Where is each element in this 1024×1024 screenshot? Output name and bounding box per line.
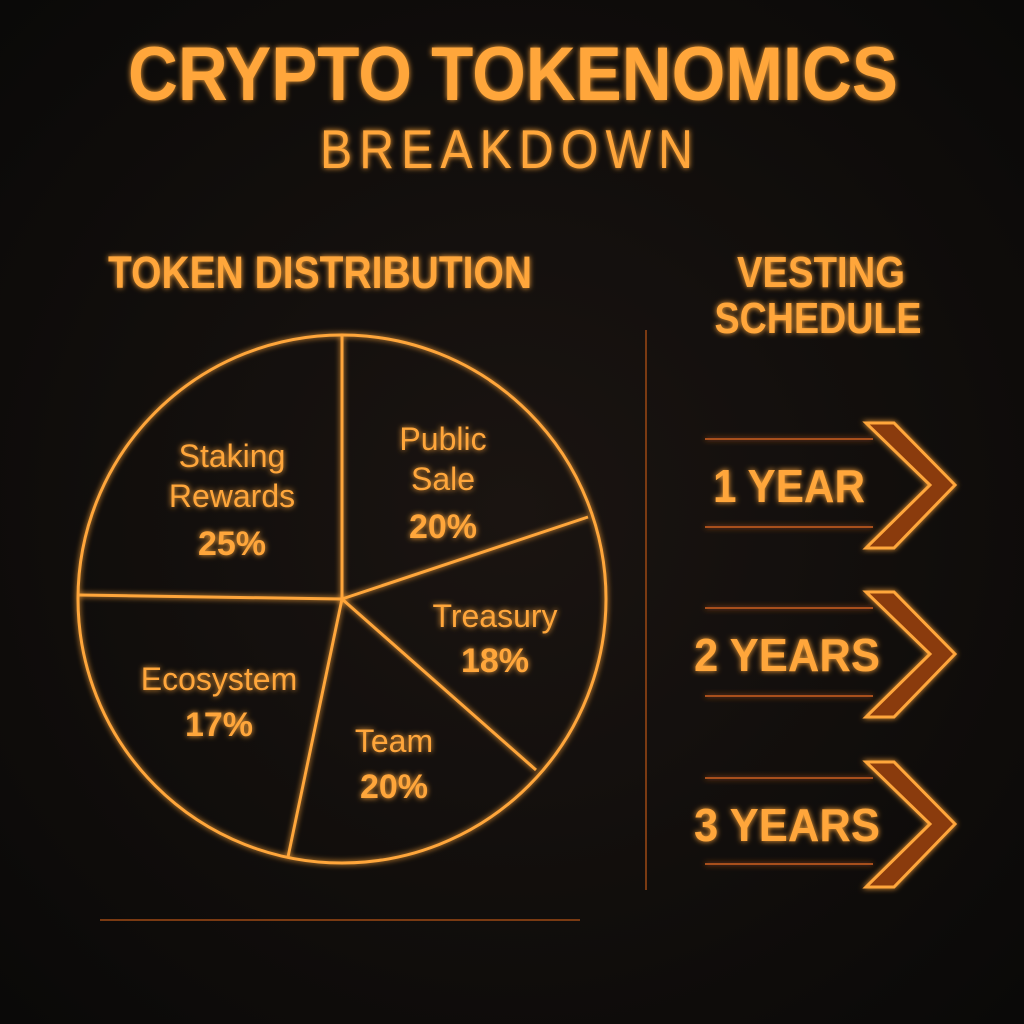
- vesting: 3 years: [694, 762, 955, 887]
- pie labels: 20%: [360, 768, 428, 806]
- pie labels: 17%: [185, 706, 253, 744]
- heading: vesting schedule: [714, 248, 922, 343]
- vesting: 1 year: [705, 423, 955, 548]
- pie labels: Ecosystem: [141, 661, 297, 697]
- pie labels: 25%: [198, 525, 266, 563]
- title: [128, 32, 898, 180]
- pie labels: Team: [355, 723, 433, 759]
- pie labels: Public: [399, 421, 487, 457]
- heading: token distribution: TOKEN DISTRIBUTION: [108, 247, 532, 298]
- divider: [645, 330, 647, 890]
- subtitle: BREAKDOWN: [320, 118, 700, 180]
- vesting: 1 year: 1 YEAR: [713, 460, 865, 512]
- heading: vesting schedule: SCHEDULE: [714, 294, 922, 343]
- vesting: 2 years: [694, 592, 955, 717]
- vesting: 3 years: 3 YEARS: [694, 799, 880, 851]
- pie chart: [78, 335, 606, 863]
- vesting: 2 years: 2 YEARS: [694, 629, 880, 681]
- heading: vesting schedule: VESTING: [737, 248, 905, 297]
- pie labels: Treasury: [432, 598, 558, 634]
- title: CRYPTO TOKENOMICS: [128, 32, 898, 117]
- pie labels: Staking: [179, 438, 285, 474]
- pie labels: 18%: [461, 642, 529, 680]
- pie labels: 20%: [409, 508, 477, 546]
- pie labels: [141, 421, 558, 806]
- pie labels: Rewards: [169, 478, 295, 514]
- pie labels: Sale: [411, 461, 475, 497]
